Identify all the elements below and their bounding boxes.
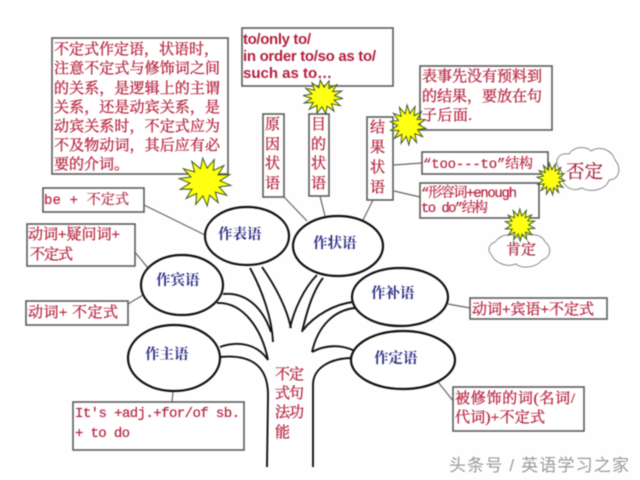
box: reason adverbial: 语 <box>265 175 280 192</box>
box: be plus infinitive: be + 不定式 <box>44 192 129 209</box>
box: purpose adverbial: 语 <box>311 175 326 192</box>
box: reason adverbial: 因 <box>265 136 280 153</box>
oval: object <box>141 255 223 315</box>
box: reason adverbial: 原 <box>265 116 280 133</box>
oval: complement: 作补语 <box>371 284 415 302</box>
watermark: 头条号 / 英语学习之家 <box>449 456 629 475</box>
box: verb object infinitive <box>470 298 607 319</box>
oval: adverbial: 作状语 <box>313 234 357 252</box>
icon: starburst negative <box>536 162 566 196</box>
box: too to structure <box>422 152 548 174</box>
oval: complement <box>352 268 448 326</box>
oval: adverbial <box>293 216 383 276</box>
oval: subject <box>128 325 220 391</box>
connector lines <box>128 163 470 402</box>
cloud: negative: 否定 <box>566 162 603 183</box>
trunk label: 法功 <box>275 404 304 421</box>
panel: attributive and adverbial note: 动宾关系时，不定式应为 <box>54 118 220 135</box>
box: it is adj for sb: + to do <box>75 426 130 442</box>
tree trunk and branches <box>217 267 355 467</box>
icon: starburst affirmative <box>502 206 538 244</box>
box: adjective enough structure: to do”结构 <box>421 199 488 217</box>
box: be plus infinitive <box>43 188 144 212</box>
box: it is adj for sb: It's +adj.+for/of sb. <box>75 406 240 422</box>
oval: predicative: 作表语 <box>218 225 262 243</box>
icon: starburst result <box>387 102 429 148</box>
panel: result note: 表事先没有预料到 <box>422 67 542 85</box>
box: verb object infinitive: 动词+宾语+不定式 <box>472 301 594 318</box>
box: purpose adverbial: 的 <box>311 136 326 153</box>
box: result adverbial: 语 <box>370 179 385 196</box>
box: purpose adverbial <box>309 114 329 196</box>
panel: attributive and adverbial note: 不定式作定语，状语时， <box>54 41 219 58</box>
oval: subject: 作主语 <box>145 346 189 363</box>
cloud: negative <box>557 148 619 190</box>
panel: result note <box>420 66 552 130</box>
box: result adverbial <box>367 117 393 200</box>
box: result adverbial: 状 <box>370 159 385 176</box>
oval: object: 作宾语 <box>156 271 200 289</box>
panel: attributive and adverbial note <box>52 38 228 174</box>
panel: purpose phrases: to/only to/ <box>243 31 312 48</box>
oval: predicative <box>205 207 289 265</box>
box: verb plus infinitive <box>26 301 128 325</box>
cloud: affirmative: 肯定 <box>506 241 536 258</box>
box: verb plus question word <box>27 224 135 266</box>
icon: starburst purpose <box>301 79 345 115</box>
box: purpose adverbial: 状 <box>311 155 326 172</box>
box: verb plus question word: 动词+疑问词+ <box>28 225 120 243</box>
panel: attributive and adverbial note: 的关系，是逻辑上的主谓 <box>54 80 220 97</box>
box: reason adverbial <box>263 114 284 197</box>
panel: attributive and adverbial note: 不及物动词，其后应有必 <box>54 136 221 154</box>
box: result adverbial: 果 <box>370 139 385 156</box>
panel: purpose phrases: in order to/so as to/ <box>243 48 377 65</box>
oval: attributive <box>351 331 455 389</box>
box: reason adverbial: 状 <box>265 155 280 172</box>
box: purpose adverbial: 目 <box>311 116 326 133</box>
box: result adverbial: 结 <box>370 119 385 136</box>
panel: attributive and adverbial note: 注意不定式与修饰词之间 <box>54 60 220 77</box>
box: modified word plus infinitive <box>453 387 584 431</box>
trunk label: 不定 <box>275 366 304 383</box>
box: adjective enough structure <box>420 183 539 218</box>
trunk label: 式句 <box>275 385 304 402</box>
box: it is adj for sb <box>73 402 244 450</box>
panel: result note: 子后面. <box>422 107 472 124</box>
box: modified word plus infinitive: 被修饰的词(名词/ <box>455 390 576 407</box>
box: too to structure: “too---to”结构 <box>423 155 533 173</box>
icon: starburst note left <box>176 155 234 209</box>
box: modified word plus infinitive: 代词)+不定式 <box>455 409 545 426</box>
trunk label: 能 <box>275 424 290 441</box>
panel: result note: 的结果，要放在句 <box>422 88 542 105</box>
panel: attributive and adverbial note: 要的介词。 <box>54 156 129 173</box>
box: adjective enough structure: “形容词+enough <box>421 185 517 202</box>
box: verb plus infinitive: 动词+ 不定式 <box>28 304 118 321</box>
cloud: affirmative <box>489 235 550 267</box>
oval: attributive: 作定语 <box>374 350 418 367</box>
trunk label <box>275 366 304 441</box>
panel: attributive and adverbial note: 关系，还是动宾关系，是 <box>54 99 220 116</box>
box: verb plus question word: 不定式 <box>30 246 73 263</box>
panel: purpose phrases: such as to… <box>243 65 332 82</box>
panel: purpose phrases <box>242 28 393 86</box>
